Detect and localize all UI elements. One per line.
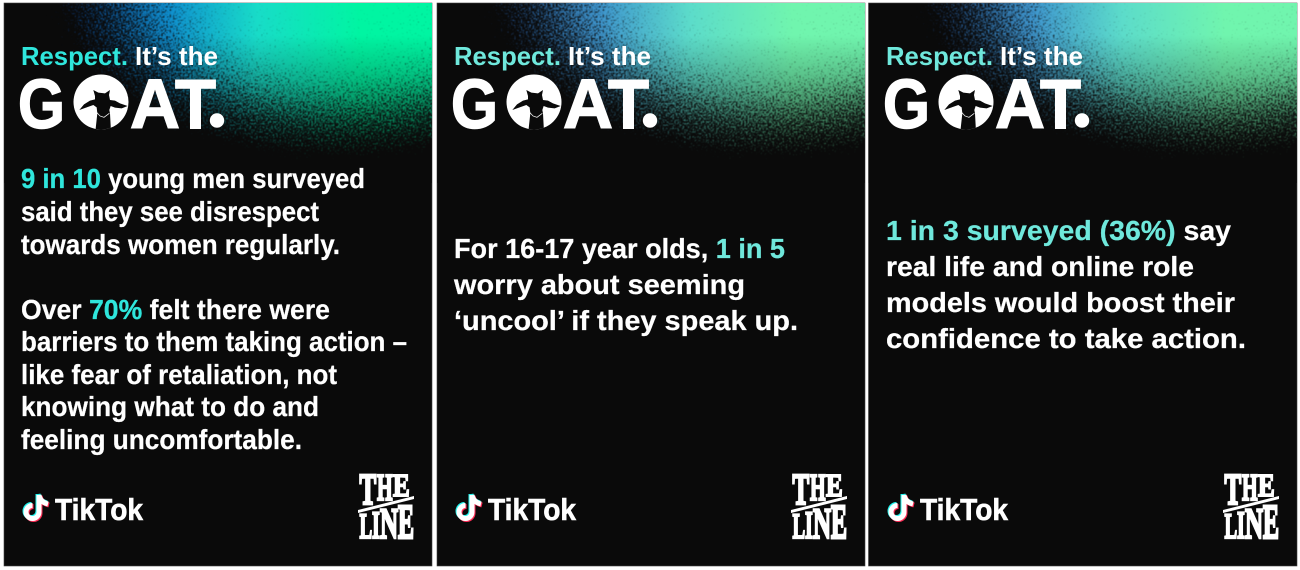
stat text block: said they see disrespect (21, 196, 319, 227)
heading: Respect. It's the: Respect. (454, 41, 561, 71)
logo: The Line: E (826, 468, 843, 504)
wordmark: GOAT with goat icon: . (215, 111, 219, 127)
stat text block: models would boost their (886, 287, 1235, 318)
wordmark: GOAT with goat icon (452, 74, 658, 130)
wordmark: GOAT with goat icon: . (1080, 111, 1084, 127)
logo: The Line (358, 465, 414, 549)
logo: The Line: T (1224, 465, 1241, 514)
panel: 16-17 year olds (437, 3, 865, 566)
stat text block: confidence to take action. (886, 323, 1246, 354)
logo: The Line: N (813, 500, 831, 548)
logo: The Line: I (805, 503, 813, 547)
logo: The Line (791, 465, 847, 549)
stat text block: knowing what to do and (21, 391, 319, 422)
stat text block: real life and online role (886, 251, 1194, 282)
wordmark: GOAT with goat icon: G (18, 65, 65, 143)
logo: The Line: H (810, 466, 826, 509)
logo: The Line: H (377, 466, 393, 509)
logo: The Line: E (398, 496, 414, 549)
stat text block: 9 in 10 young men surveyed (21, 163, 365, 194)
logo: The Line: N (380, 500, 398, 548)
stat text block (21, 163, 407, 455)
wordmark: GOAT with goat icon: G (883, 65, 930, 143)
stat text block: like fear of retaliation, not (21, 359, 337, 390)
panel: young men see disrespect (4, 3, 432, 566)
logo: The Line: N (1245, 500, 1263, 548)
wordmark: GOAT with goat icon: A (995, 65, 1045, 143)
stat text block (886, 215, 1246, 354)
logo: The Line: L (792, 507, 805, 547)
logo: TikTok: TikTok (55, 492, 144, 527)
wordmark: GOAT with goat icon: T (175, 65, 216, 143)
stat text block: Over 70% felt there were (21, 294, 330, 325)
logo: The Line (1223, 465, 1279, 549)
logo: The Line: T (792, 465, 809, 514)
heading: Respect. It's the (886, 41, 1083, 71)
heading: Respect. It's the: Respect. (886, 41, 993, 71)
stat text block (453, 233, 798, 336)
heading: Respect. It's the: Respect. (21, 41, 128, 71)
wordmark: GOAT with goat icon: O (515, 65, 555, 143)
logo: The Line: E (831, 496, 847, 549)
panel: role models (868, 3, 1297, 566)
heading: Respect. It's the (454, 41, 651, 71)
logo: The Line: E (393, 468, 410, 504)
wordmark: GOAT with goat icon (20, 74, 224, 130)
wordmark: GOAT with goat icon: G (451, 65, 498, 143)
logo: TikTok (890, 492, 1009, 527)
stat text block: feeling uncomfortable. (21, 424, 302, 455)
grainy gradient header (437, 3, 865, 183)
logo: The Line: H (1242, 466, 1258, 509)
wordmark: GOAT with goat icon: T (1040, 65, 1081, 143)
stat text block: barriers to them taking action – (21, 326, 407, 357)
wordmark: GOAT with goat icon: O (82, 65, 122, 143)
grainy gradient header (4, 3, 432, 183)
logo: TikTok (25, 492, 144, 527)
wordmark: GOAT with goat icon: A (130, 65, 180, 143)
logo: The Line: T (360, 465, 376, 514)
logo: TikTok: TikTok (488, 492, 577, 527)
stat text block: For 16-17 year olds, 1 in 5 (454, 233, 785, 264)
stat text block: ‘uncool’ if they speak up. (454, 305, 798, 336)
heading: Respect. It's the: It’s the (135, 41, 218, 71)
logo: TikTok: TikTok (920, 492, 1009, 527)
stat text block: 1 in 3 surveyed (36%) say (886, 215, 1231, 246)
logo: TikTok (458, 492, 577, 527)
logo: The Line: E (1258, 468, 1275, 504)
logo: The Line: E (1263, 496, 1279, 549)
logo: The Line: I (1237, 503, 1245, 547)
wordmark: GOAT with goat icon: T (608, 65, 649, 143)
stat text block: towards women regularly. (21, 229, 340, 260)
heading: Respect. It's the (21, 41, 218, 71)
stat text block: worry about seeming (453, 269, 745, 300)
grainy gradient header (868, 3, 1297, 183)
heading: Respect. It's the: It’s the (1000, 41, 1083, 71)
logo: The Line: I (372, 503, 380, 547)
wordmark: GOAT with goat icon (884, 74, 1090, 130)
heading: Respect. It's the: It’s the (568, 41, 651, 71)
logo: The Line: L (1224, 507, 1237, 547)
wordmark: GOAT with goat icon: O (947, 65, 987, 143)
wordmark: GOAT with goat icon: A (563, 65, 613, 143)
wordmark: GOAT with goat icon: . (648, 111, 652, 127)
logo: The Line: L (360, 507, 372, 547)
